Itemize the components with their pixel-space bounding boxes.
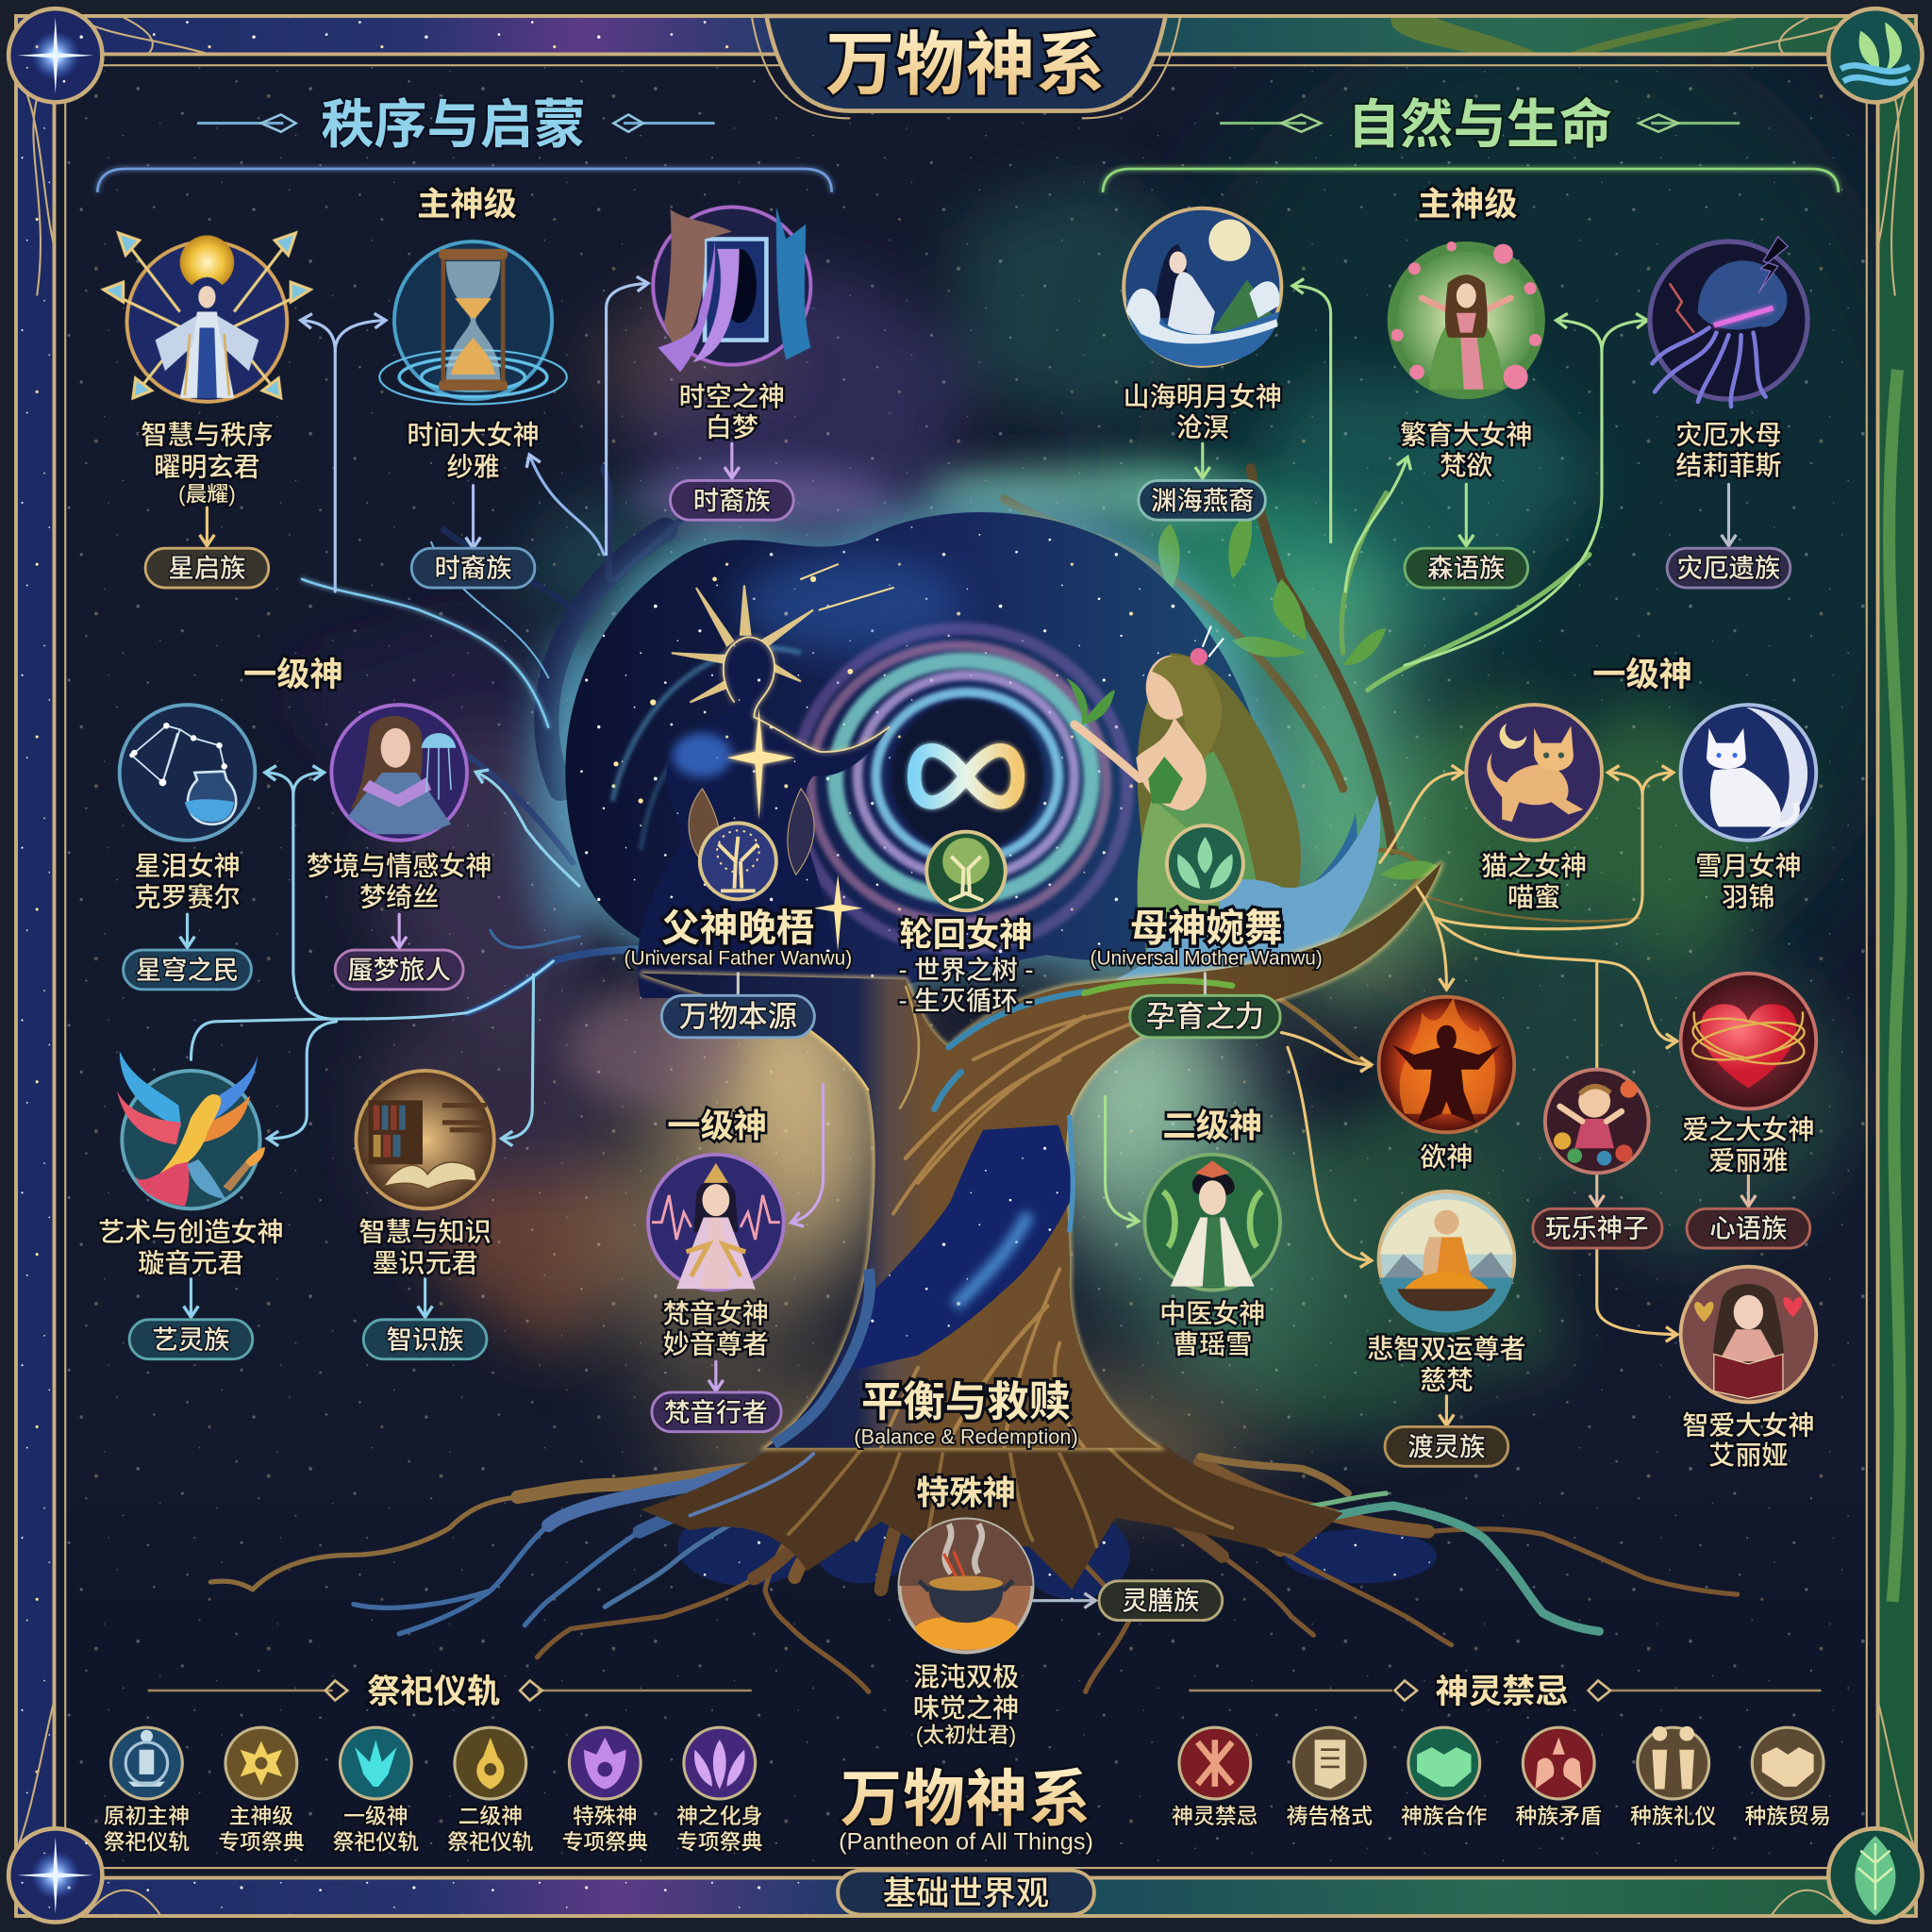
world tree roots xyxy=(210,1444,1738,1691)
clan pills: 艺灵族 xyxy=(152,1324,230,1354)
ritual icons row xyxy=(111,1727,756,1799)
heading: taboos xyxy=(1189,1674,1821,1710)
balance heading: (Balance & Redemption) xyxy=(854,1424,1078,1448)
god name labels: (晨耀) xyxy=(178,482,236,507)
icon: dream goddess xyxy=(331,705,467,841)
icon: compassion monk xyxy=(1379,1191,1514,1333)
clan pills: 渡灵族 xyxy=(1407,1432,1485,1461)
icon: space-time portal xyxy=(653,207,810,372)
clan pills: 时裔族 xyxy=(434,554,512,583)
bottom plaque xyxy=(838,1871,1094,1915)
clan pills: 时裔族 xyxy=(693,486,771,515)
tier labels: 特殊神 xyxy=(916,1475,1016,1512)
god name labels: 中医女神 xyxy=(1159,1299,1265,1328)
god name labels: 艾丽娅 xyxy=(1708,1441,1789,1470)
god name labels: 慈梵 xyxy=(1420,1365,1473,1394)
god name labels: 沧溟 xyxy=(1176,413,1229,442)
god name labels: 艺术与创造女神 xyxy=(98,1218,284,1247)
god name labels: 白梦 xyxy=(706,413,758,442)
world tree upper branches xyxy=(302,468,1639,1066)
icon: star tears constellation xyxy=(120,705,255,841)
god name labels: 爱丽雅 xyxy=(1708,1146,1789,1175)
god name labels: 璇音元君 xyxy=(138,1248,244,1277)
god name labels: 混沌双极 xyxy=(913,1662,1019,1691)
icon: cat goddess xyxy=(1466,705,1602,841)
central heading: reincarnation goddess xyxy=(898,917,1034,1015)
god name labels: 智爱大女神 xyxy=(1682,1411,1815,1441)
god name labels: 智慧与秩序 xyxy=(141,421,274,450)
central heading: reincarnation goddess: - 世界之树 - xyxy=(898,955,1034,984)
ritual labels: 一级神 xyxy=(343,1804,408,1828)
god name labels: 星泪女神 xyxy=(134,852,241,881)
clan pills: 万物本源 xyxy=(679,1000,797,1033)
central heading: mother goddess xyxy=(1091,907,1323,970)
taboo labels xyxy=(1172,1804,1831,1828)
god name labels: 猫之女神 xyxy=(1481,852,1587,881)
ritual labels xyxy=(104,1804,763,1855)
god name labels: 纱雅 xyxy=(446,453,500,482)
icon: chaos cauldron xyxy=(899,1519,1033,1653)
top title plaque: 万物神系 xyxy=(825,27,1107,104)
section heading: nature and life xyxy=(1220,94,1740,154)
god name labels: 味觉之神 xyxy=(913,1693,1019,1723)
god name labels xyxy=(98,382,1815,1747)
clan pills: 智识族 xyxy=(387,1324,464,1354)
tier labels: 一级神 xyxy=(667,1108,767,1144)
icon: brahma sound goddess xyxy=(648,1155,784,1291)
god name labels: 梵欲 xyxy=(1440,451,1492,480)
clan pills: 灾厄遗族 xyxy=(1677,554,1780,583)
cosmic crown xyxy=(556,498,1283,1000)
god name labels: 羽锦 xyxy=(1722,882,1774,911)
central badge: mother xyxy=(1167,825,1243,902)
icon: medicine goddess xyxy=(1144,1155,1280,1291)
corner medallion: top right wave leaf xyxy=(1828,8,1923,102)
balance heading: 平衡与救赎 xyxy=(861,1379,1071,1425)
ritual labels: 特殊神 xyxy=(573,1804,638,1828)
icon: hourglass xyxy=(379,242,567,404)
clan pills: 星启族 xyxy=(168,554,246,583)
heading: taboos: 神灵禁忌 xyxy=(1436,1674,1569,1710)
trunk xyxy=(641,862,1441,1448)
god name labels: 墨识元君 xyxy=(372,1248,478,1277)
ritual labels: 原初主神 xyxy=(104,1804,190,1828)
central badge: father xyxy=(700,823,776,899)
icon: mountain sea moon xyxy=(1124,208,1281,366)
god name labels: 繁育大女神 xyxy=(1400,421,1532,450)
tier labels: 一级神 xyxy=(243,657,343,693)
ritual labels: 专项祭典 xyxy=(676,1830,763,1855)
clan pills: 孕育之力 xyxy=(1146,1000,1264,1033)
god name labels: 梦绮丝 xyxy=(359,882,439,911)
taboo labels: 神灵禁忌 xyxy=(1172,1804,1258,1828)
ritual labels: 祭祀仪轨 xyxy=(333,1830,419,1855)
clan pills: 玩乐神子 xyxy=(1545,1214,1649,1243)
taboo labels: 种族贸易 xyxy=(1744,1804,1831,1828)
clan pills xyxy=(124,480,1810,1621)
icon: fertility goddess xyxy=(1391,242,1541,394)
connector lines xyxy=(188,283,1748,1601)
corner medallion: bottom left star xyxy=(8,1828,102,1923)
section heading: order and enlightenment xyxy=(197,94,715,154)
father god silhouette xyxy=(613,576,890,998)
central heading: reincarnation goddess: - 生灭循环 - xyxy=(898,986,1034,1015)
ritual labels: 专项祭典 xyxy=(218,1830,305,1855)
ritual labels: 二级神 xyxy=(458,1804,523,1828)
tier labels: 主神级 xyxy=(417,186,517,223)
clan pills: 森语族 xyxy=(1427,554,1505,583)
taboo labels: 种族礼仪 xyxy=(1630,1804,1717,1828)
god name labels: 雪月女神 xyxy=(1695,852,1802,881)
taboo labels: 神族合作 xyxy=(1401,1804,1488,1828)
heading: rituals: 祭祀仪轨 xyxy=(367,1674,500,1710)
bottom plaque: 基础世界观 xyxy=(883,1875,1049,1912)
bracket: nature side xyxy=(1103,169,1839,192)
bracket: order side xyxy=(97,169,832,192)
clan pills: 心语族 xyxy=(1709,1214,1787,1243)
central heading: mother goddess: 母神婉舞 xyxy=(1130,907,1283,950)
central heading: father god: (Universal Father Wanwu) xyxy=(625,948,852,970)
icon: wise love goddess xyxy=(1681,1267,1816,1402)
central heading: reincarnation goddess: 轮回女神 xyxy=(899,917,1032,954)
ritual labels: 专项祭典 xyxy=(562,1830,648,1855)
god name labels: 梵音女神 xyxy=(663,1299,769,1328)
clan pills: 灵膳族 xyxy=(1122,1586,1199,1615)
god name labels: 结莉菲斯 xyxy=(1675,451,1782,480)
god name labels: 曜明玄君 xyxy=(154,453,260,482)
rebirth swirl and infinity symbol xyxy=(794,628,1127,949)
ritual labels: 祭祀仪轨 xyxy=(104,1830,190,1855)
ritual labels: 神之化身 xyxy=(676,1804,762,1828)
god name labels: 喵蜜 xyxy=(1507,882,1560,911)
corner medallion: top left star xyxy=(8,8,102,102)
thin outer tips xyxy=(210,1453,1738,1691)
god name labels: 智慧与知识 xyxy=(358,1218,491,1247)
lower title: (Pantheon of All Things) xyxy=(839,1829,1093,1856)
god name labels: 梦境与情感女神 xyxy=(307,852,491,881)
god name labels: 灾厄水母 xyxy=(1675,421,1782,450)
god name labels: (太初灶君) xyxy=(916,1723,1016,1747)
ritual labels: 主神级 xyxy=(229,1804,293,1828)
icon: calamity jellyfish xyxy=(1650,237,1807,407)
section heading: nature and life: 自然与生命 xyxy=(1347,94,1612,154)
icon: desire god flames xyxy=(1379,997,1514,1132)
god name labels: 山海明月女神 xyxy=(1124,382,1282,411)
icon: wisdom and order xyxy=(104,233,310,402)
god name labels: 爱之大女神 xyxy=(1682,1115,1815,1144)
god name labels: 欲神 xyxy=(1420,1142,1473,1172)
clan pills: 蜃梦旅人 xyxy=(347,955,451,984)
god name labels: 时间大女神 xyxy=(407,421,540,450)
taboo labels: 祷告格式 xyxy=(1287,1804,1373,1828)
lower title: 万物神系 xyxy=(841,1764,1091,1833)
icon: play deity child xyxy=(1545,1070,1649,1173)
taboo icons row xyxy=(1179,1726,1824,1799)
section heading: order and enlightenment: 秩序与启蒙 xyxy=(321,94,586,154)
god name labels: 悲智双运尊者 xyxy=(1367,1335,1526,1364)
central heading: mother goddess: (Universal Mother Wanwu) xyxy=(1091,948,1323,970)
central heading: father god xyxy=(625,907,852,970)
ritual labels: 祭祀仪轨 xyxy=(447,1830,534,1855)
top title plaque xyxy=(752,16,1180,118)
tier labels: 一级神 xyxy=(1592,657,1692,693)
tier labels: 二级神 xyxy=(1162,1108,1262,1144)
corner medallion: bottom right leaf xyxy=(1828,1828,1923,1923)
central badge: tree of rebirth xyxy=(926,832,1006,910)
central heading: father god: 父神晚梧 xyxy=(661,907,814,950)
clan pills: 星穹之民 xyxy=(136,955,239,984)
god name labels: 妙音尊者 xyxy=(663,1329,769,1358)
icon: heart of love xyxy=(1681,974,1816,1109)
icon: book of knowledge xyxy=(356,1071,494,1208)
taboo labels: 种族矛盾 xyxy=(1516,1804,1602,1828)
tier labels: 主神级 xyxy=(1418,186,1517,223)
god name labels: 时空之神 xyxy=(679,382,785,411)
heading: rituals xyxy=(148,1674,752,1710)
balance heading xyxy=(854,1379,1078,1448)
tier labels xyxy=(243,186,1692,1512)
god name labels: 克罗赛尔 xyxy=(134,882,241,911)
clan pills: 梵音行者 xyxy=(664,1397,768,1426)
god name labels: 曹瑶雪 xyxy=(1173,1329,1252,1358)
mother goddess figure xyxy=(1066,626,1380,991)
icon: snow moon cat xyxy=(1681,705,1816,841)
icon: phoenix of art xyxy=(117,1051,265,1208)
clan pills: 渊海燕裔 xyxy=(1151,486,1255,515)
